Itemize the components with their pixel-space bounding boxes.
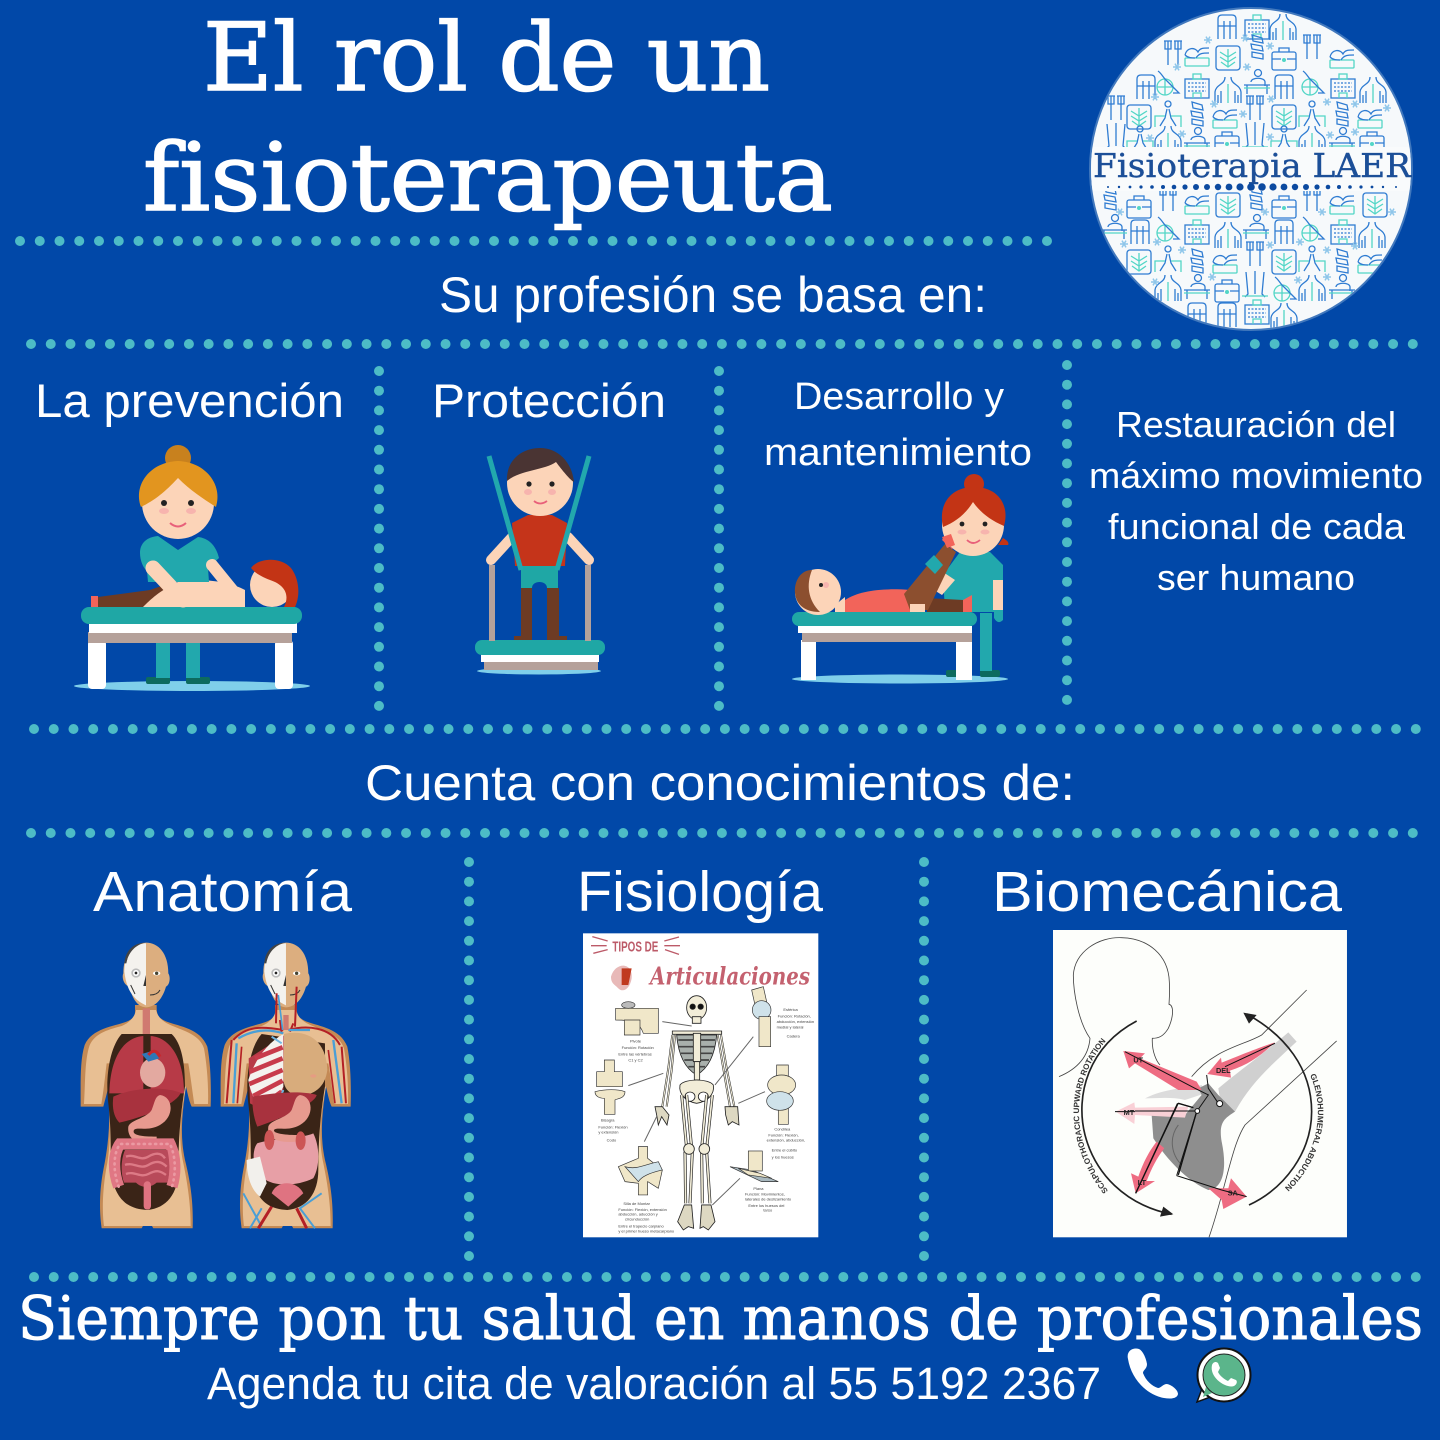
call to action: phone number: Agenda tu cita de valoración al 55 5192 2367 bbox=[207, 1358, 1101, 1409]
illustration: therapist massaging patient bbox=[74, 445, 310, 691]
heading: Fisiología: Fisiología bbox=[577, 860, 823, 924]
poster title: TIPOS DE bbox=[612, 940, 658, 956]
joint captions: Función: Flexión, extensión bbox=[618, 1207, 667, 1212]
heading: Su profesión se basa en: Su profesión se basa en: bbox=[439, 267, 987, 323]
panel: restauración: ser humano bbox=[1157, 557, 1355, 598]
logo icon pattern bbox=[1085, 14, 1417, 329]
arc captions bbox=[1074, 1038, 1324, 1194]
joint captions: Cadera bbox=[787, 1034, 800, 1039]
joint captions: laterales de deslizamiento bbox=[745, 1196, 792, 1201]
pointer arrows bbox=[628, 1022, 765, 1205]
joint captions: Silla de Montar bbox=[623, 1201, 651, 1206]
illustration: shoulder biomechanics diagram bbox=[1053, 930, 1347, 1238]
joint captions: circunducción bbox=[625, 1216, 649, 1221]
panel: restauración: funcional de cada bbox=[1108, 506, 1406, 547]
heading: Anatomía: Anatomía bbox=[93, 860, 352, 924]
illustration: shoulder biomechanics diagram: SA bbox=[1228, 1189, 1239, 1198]
icon: whatsapp bbox=[1197, 1348, 1250, 1402]
arc captions: SCAPULOTHORACIC UPWARD ROTATION bbox=[1074, 1038, 1108, 1194]
illustration: shoulder biomechanics diagram: MT bbox=[1124, 1108, 1135, 1117]
heading: Desarrollo y mantenimiento bbox=[764, 376, 1032, 474]
icon: phone bbox=[1128, 1348, 1178, 1399]
panel: protección bbox=[432, 374, 666, 674]
logo dotted divider bbox=[1107, 183, 1397, 191]
rotation arcs bbox=[1082, 1014, 1312, 1214]
poster title bbox=[591, 937, 810, 990]
poster title: Articulaciones bbox=[648, 961, 810, 990]
panel: desarrollo y mantenimiento bbox=[764, 376, 1032, 684]
muscle force arrows bbox=[1116, 1042, 1275, 1209]
heading: Desarrollo y mantenimiento: mantenimiento bbox=[764, 432, 1032, 474]
joint captions: medial y lateral bbox=[777, 1024, 804, 1029]
illustration: patient in harness bbox=[475, 448, 605, 674]
joint captions: Codo bbox=[607, 1138, 617, 1143]
title bbox=[143, 4, 833, 233]
heading: Desarrollo y mantenimiento: Desarrollo y bbox=[794, 376, 1004, 418]
panel: fisiología bbox=[577, 860, 823, 1237]
right torso with systems bbox=[221, 943, 351, 1228]
joint captions: y los huesos bbox=[772, 1154, 794, 1159]
logo: Fisioterapia LAER bbox=[1085, 8, 1417, 330]
illustration: tipos de articulaciones poster bbox=[583, 933, 818, 1237]
joint captions: abducción, extensión bbox=[777, 1019, 814, 1024]
panel: biomecánica bbox=[992, 860, 1347, 1238]
heading: Cuenta con conocimientos de: Cuenta con conocimientos de: bbox=[365, 755, 1075, 811]
joint captions: extensión, abducción, bbox=[767, 1138, 805, 1143]
scapula and arm bbox=[1145, 1032, 1297, 1190]
panel: restauración bbox=[1089, 404, 1423, 598]
title: fisioterapeuta bbox=[143, 124, 833, 233]
panel: restauración: máximo movimiento bbox=[1089, 455, 1423, 496]
joint captions: Esférica bbox=[783, 1007, 798, 1012]
joint captions: C1 y C2 bbox=[628, 1058, 644, 1063]
illustration: shoulder biomechanics diagram: LT bbox=[1138, 1178, 1147, 1187]
joint diagrams bbox=[595, 987, 796, 1195]
joint captions: abducción, aducción y bbox=[618, 1212, 658, 1217]
panel: anatomía bbox=[81, 860, 352, 1228]
heading: Protección: Protección bbox=[432, 374, 666, 427]
joint captions: Bisagra bbox=[601, 1118, 615, 1123]
joint captions: y el primer hueso metacarpiano bbox=[618, 1228, 675, 1233]
panel: la prevención bbox=[35, 374, 344, 691]
joint captions: Pivote bbox=[630, 1038, 642, 1043]
heading: Biomecánica: Biomecánica bbox=[992, 860, 1342, 924]
joint captions: Función: Flexión, bbox=[768, 1133, 799, 1138]
panel: restauración: Restauración del bbox=[1116, 404, 1396, 445]
joint captions: Plana bbox=[753, 1186, 764, 1191]
joint captions: Función: Movimientos, bbox=[745, 1192, 785, 1197]
title: El rol de un bbox=[203, 4, 770, 113]
joint captions: y extensión bbox=[598, 1130, 618, 1135]
joint captions: Entre el trapecio carpiano bbox=[618, 1224, 665, 1229]
heading: La prevención: La prevención bbox=[35, 374, 344, 427]
illustration: shoulder biomechanics diagram: UT bbox=[1133, 1055, 1144, 1064]
arc captions: GLENOHUMERAL ABDUCTION bbox=[1285, 1074, 1324, 1192]
illustration: human torso anatomy bbox=[81, 943, 351, 1228]
joint captions: Entre las vértebras bbox=[618, 1052, 652, 1057]
joint captions: Condílea bbox=[774, 1126, 791, 1131]
joint captions bbox=[598, 1007, 814, 1233]
joint captions: Función: Rotación, bbox=[778, 1014, 811, 1019]
force lines and labels bbox=[1115, 1043, 1275, 1197]
logo wordmark: Fisioterapia LAER bbox=[1093, 146, 1412, 185]
left torso with organs bbox=[81, 943, 211, 1228]
joint captions: Entre los huesos del bbox=[748, 1203, 785, 1208]
illustration: shoulder biomechanics diagram: DEL bbox=[1216, 1066, 1231, 1075]
joint captions: Función: Rotación bbox=[622, 1045, 654, 1050]
illustration: therapist stretching patient bbox=[792, 474, 1008, 684]
joint captions: Entre el cúbito bbox=[772, 1148, 798, 1153]
joint captions: tarso bbox=[763, 1208, 773, 1213]
joint captions: Función: Flexión bbox=[598, 1124, 628, 1129]
skeleton bbox=[655, 996, 739, 1230]
